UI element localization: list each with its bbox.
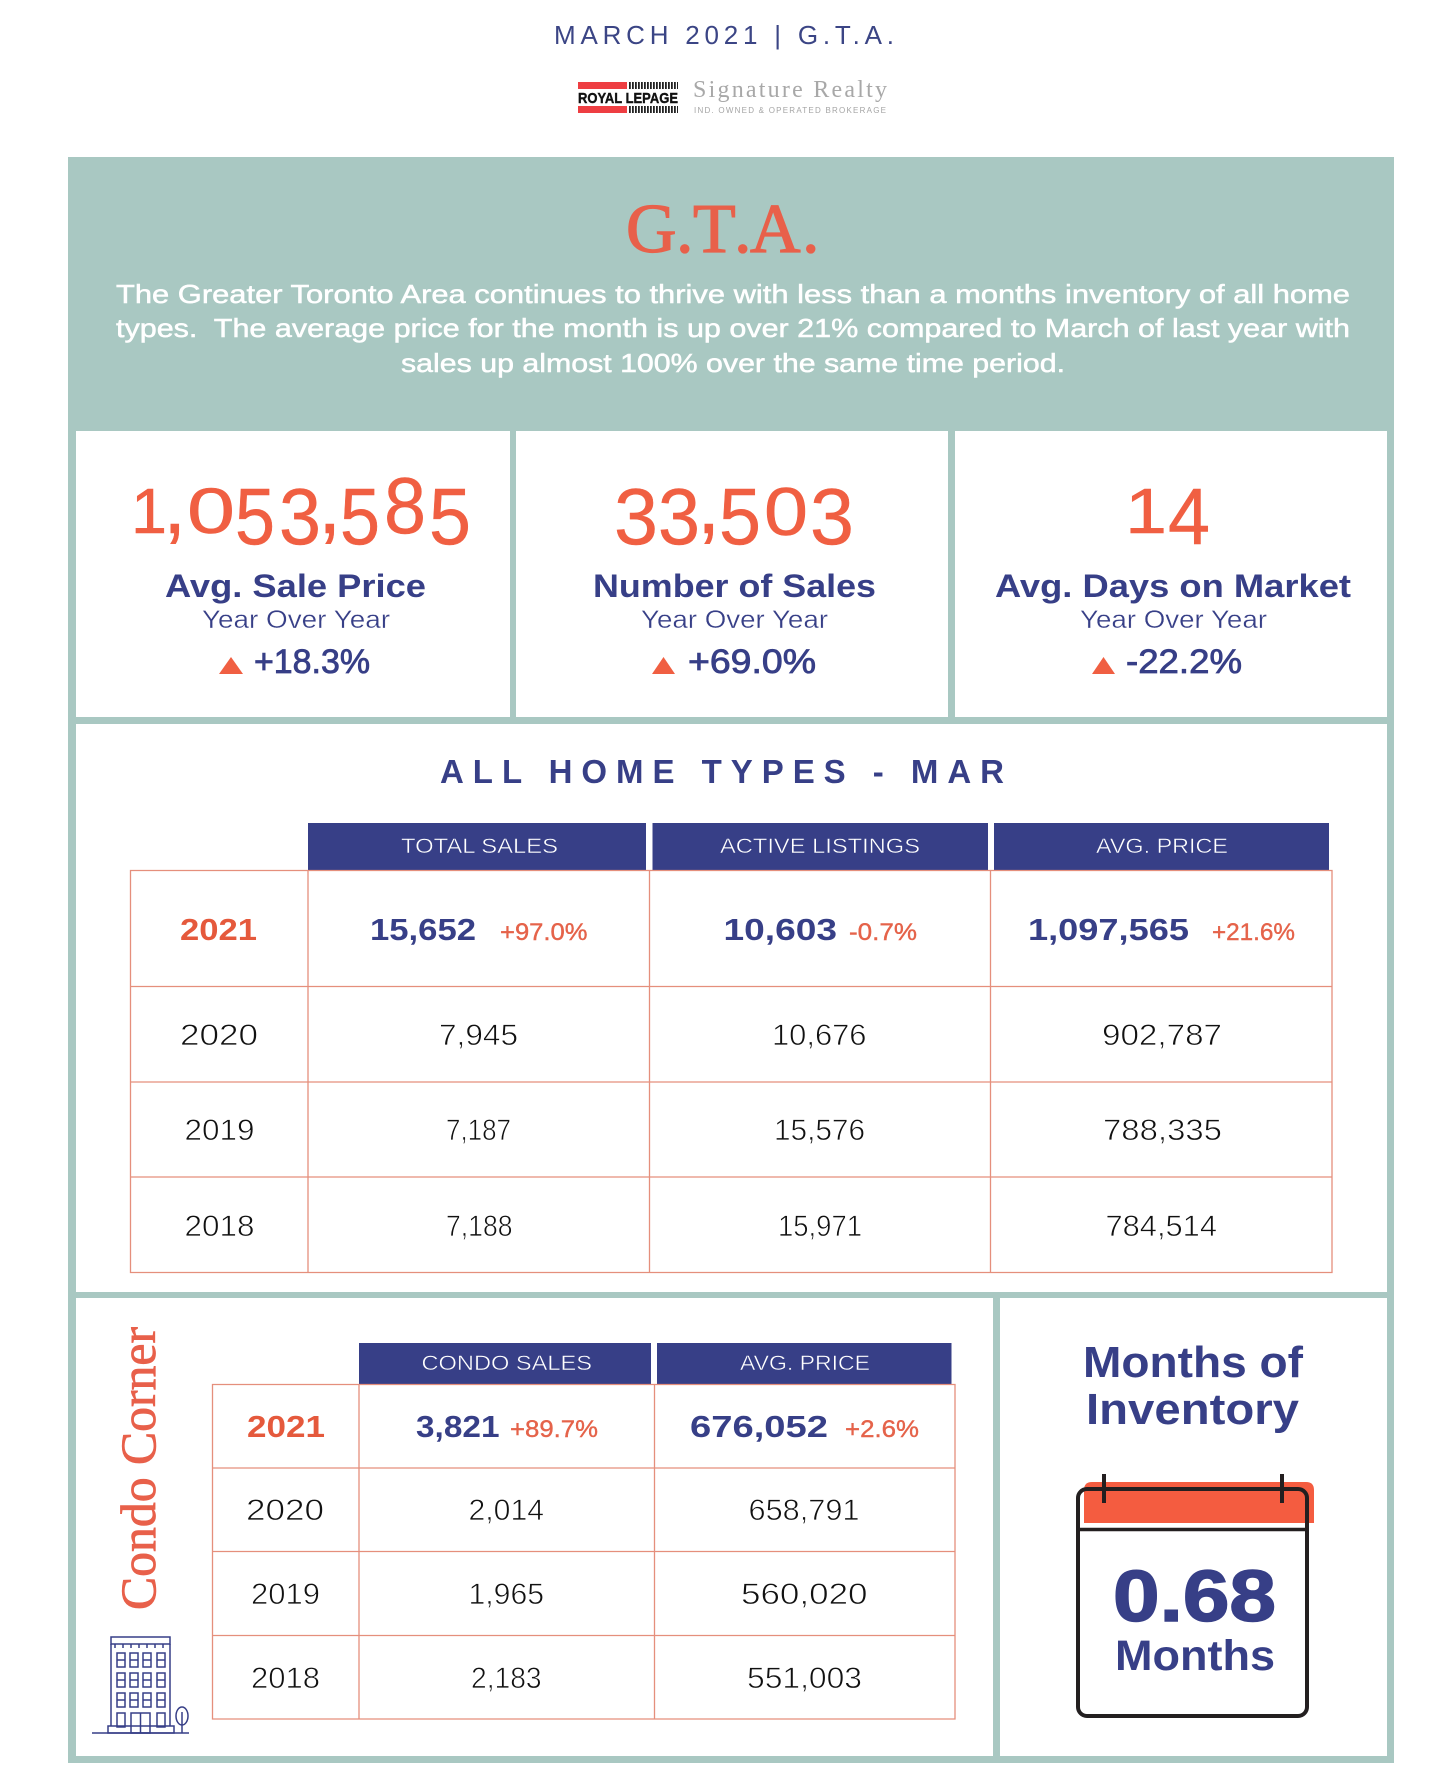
row: 2021: +97.0% — [500, 919, 588, 946]
table grid: condo — [212, 1384, 955, 1719]
row: 2019 — [184, 1114, 1222, 1147]
heading: months of inventory: Inventory — [1086, 1385, 1300, 1434]
header: date title: MARCH 2021 | G.T.A. — [554, 20, 894, 50]
row: 2020: 2020 — [180, 1019, 258, 1052]
condo row: 2018 — [251, 1662, 862, 1695]
label: Year Over Year: Year Over Year — [1080, 606, 1267, 634]
row: 2019: 2019 — [184, 1114, 254, 1147]
condo row: 2018: 551,003 — [747, 1662, 862, 1695]
condo row: 2020: 658,791 — [748, 1494, 860, 1527]
condo row: 2018: 2,183 — [471, 1662, 542, 1695]
logo: Royal LePage Signature Realty: Signature Realty — [693, 77, 887, 103]
table header: condo sales — [359, 1343, 651, 1384]
table header: avg price: AVG. PRICE — [1096, 835, 1228, 858]
condo row: 2021: 3,821 — [416, 1409, 500, 1444]
big number: 1,053,585: 5 — [429, 472, 471, 561]
big number: 1,053,585: 5 — [340, 472, 380, 561]
big number: 33,503: 3 — [658, 472, 700, 561]
big number: 1,053,585: 0 — [187, 475, 235, 547]
icon: up triangle — [219, 657, 243, 674]
row: 2020: 7,945 — [439, 1019, 518, 1052]
condo row: 2021: 2021 — [247, 1409, 325, 1444]
row: 2021: -0.7% — [849, 919, 917, 946]
text block: intro paragraph: types. The average price for the month is up over 21% compared to March of last year with — [116, 313, 1350, 343]
panel: condo corner — [76, 1298, 993, 1756]
big number: 33,503: 0 — [764, 474, 808, 550]
big number: 33,503: , — [697, 457, 720, 551]
big number: 1,053,585: 5 — [235, 472, 275, 561]
table header: condo sales: CONDO SALES — [422, 1352, 592, 1375]
table grid: all home types — [130, 870, 1332, 1272]
heading: G.T.A.: A — [750, 191, 801, 268]
text block: intro paragraph: The Greater Toronto Area continues to thrive with less than a months inventory of all home — [116, 279, 1350, 309]
heading: all home types - mar: ALL HOME TYPES - MAR — [440, 753, 1004, 790]
change: -22.2%: -22.2% — [1126, 643, 1242, 681]
big number: 1,053,585: , — [163, 457, 186, 551]
label: Avg. Days on Market: Avg. Days on Market — [995, 568, 1351, 604]
icon: up triangle — [1092, 657, 1115, 674]
table header: total sales — [308, 823, 646, 870]
row: 2018: 784,514 — [1106, 1210, 1217, 1243]
change: +18.3%: +18.3% — [254, 643, 370, 681]
big number: 33,503: 3 — [614, 472, 658, 561]
row: 2021: 10,603 — [724, 912, 837, 947]
heading: G.T.A.: T — [693, 191, 736, 268]
row: 2018 — [184, 1210, 1217, 1243]
icon: calendar — [1078, 1474, 1314, 1716]
label: Avg. Sale Price: Avg. Sale Price — [165, 568, 426, 604]
text block: intro paragraph — [116, 279, 1350, 378]
condo row: 2021: +2.6% — [845, 1416, 919, 1443]
table header: active listings: ACTIVE LISTINGS — [720, 835, 920, 858]
table header: condo avg price — [657, 1343, 952, 1384]
big number: 14: 4 — [1168, 472, 1210, 561]
big number: 33,503: 3 — [810, 472, 854, 561]
panel: average days on market card — [955, 431, 1387, 717]
label: Number of Sales: Number of Sales — [593, 568, 876, 604]
condo row: 2019: 2019 — [251, 1578, 320, 1611]
row: 2018: 7,188 — [446, 1210, 512, 1243]
big number: 1,053,585: 1 — [131, 475, 167, 547]
icon: condo building — [92, 1637, 189, 1733]
condo row: 2020 — [246, 1494, 860, 1527]
row: 2021: +21.6% — [1212, 919, 1295, 946]
table header: total sales: TOTAL SALES — [401, 835, 558, 858]
text block: intro paragraph: sales up almost 100% over the same time period. — [401, 348, 1065, 378]
big number: 33,503: 5 — [719, 472, 761, 561]
row: 2019: 7,187 — [446, 1114, 511, 1147]
heading: condo corner vertical: Condo Corner — [110, 1327, 166, 1610]
icon: up triangle — [652, 657, 675, 674]
table header: active listings — [652, 823, 988, 870]
heading: months of inventory — [1083, 1338, 1303, 1434]
row: 2018: 15,971 — [778, 1210, 862, 1243]
condo row: 2021: 676,052 — [690, 1409, 828, 1444]
panel: all home types — [76, 724, 1387, 1292]
condo row: 2020: 2020 — [246, 1494, 324, 1527]
logo: Royal LePage Signature Realty: ROYAL LEPAGE — [578, 90, 678, 107]
heading: G.T.A.: . — [676, 191, 694, 268]
label: months: Months — [1115, 1632, 1275, 1680]
change: +69.0%: +69.0% — [688, 643, 816, 681]
table header: avg price — [994, 823, 1329, 870]
row: 2020: 10,676 — [772, 1019, 866, 1052]
condo row: 2018: 2018 — [251, 1662, 320, 1695]
row: 2021: 2021 — [180, 912, 257, 947]
big number: 14: 1 — [1125, 475, 1167, 547]
heading: months of inventory: Months of — [1083, 1338, 1303, 1387]
row: 2021 — [180, 912, 1295, 947]
panel: number of sales card — [516, 431, 948, 717]
condo row: 2021 — [247, 1409, 919, 1444]
condo row: 2020: 2,014 — [468, 1494, 544, 1527]
value: 0.68: 0.68 — [1113, 1557, 1276, 1637]
logo: Royal LePage Signature Realty: IND. OWNED & OPERATED BROKERAGE — [694, 106, 886, 115]
heading: G.T.A.: . — [734, 191, 752, 268]
condo row: 2019: 1,965 — [468, 1578, 544, 1611]
row: 2019: 788,335 — [1103, 1114, 1222, 1147]
table header: condo avg price: AVG. PRICE — [740, 1352, 870, 1375]
heading: G.T.A.: . — [802, 191, 820, 268]
panel: months of inventory — [1000, 1298, 1387, 1756]
big number: 1,053,585: 3 — [279, 472, 321, 561]
row: 2019: 15,576 — [774, 1114, 865, 1147]
row: 2020 — [180, 1019, 1222, 1052]
big number: 1,053,585: , — [318, 457, 341, 551]
label: Year Over Year: Year Over Year — [202, 606, 390, 634]
row: 2020: 902,787 — [1102, 1019, 1222, 1052]
label: Year Over Year: Year Over Year — [641, 606, 828, 634]
condo row: 2021: +89.7% — [510, 1416, 598, 1443]
condo row: 2019 — [251, 1578, 868, 1611]
row: 2021: 1,097,565 — [1028, 912, 1189, 947]
heading: G.T.A.: G — [626, 191, 677, 268]
row: 2018: 2018 — [184, 1210, 254, 1243]
logo: Royal LePage Signature Realty — [578, 77, 887, 115]
big number: 1,053,585: 8 — [384, 461, 426, 550]
row: 2021: 15,652 — [370, 912, 476, 947]
panel: average sale price card — [76, 431, 510, 717]
condo row: 2019: 560,020 — [741, 1578, 868, 1611]
